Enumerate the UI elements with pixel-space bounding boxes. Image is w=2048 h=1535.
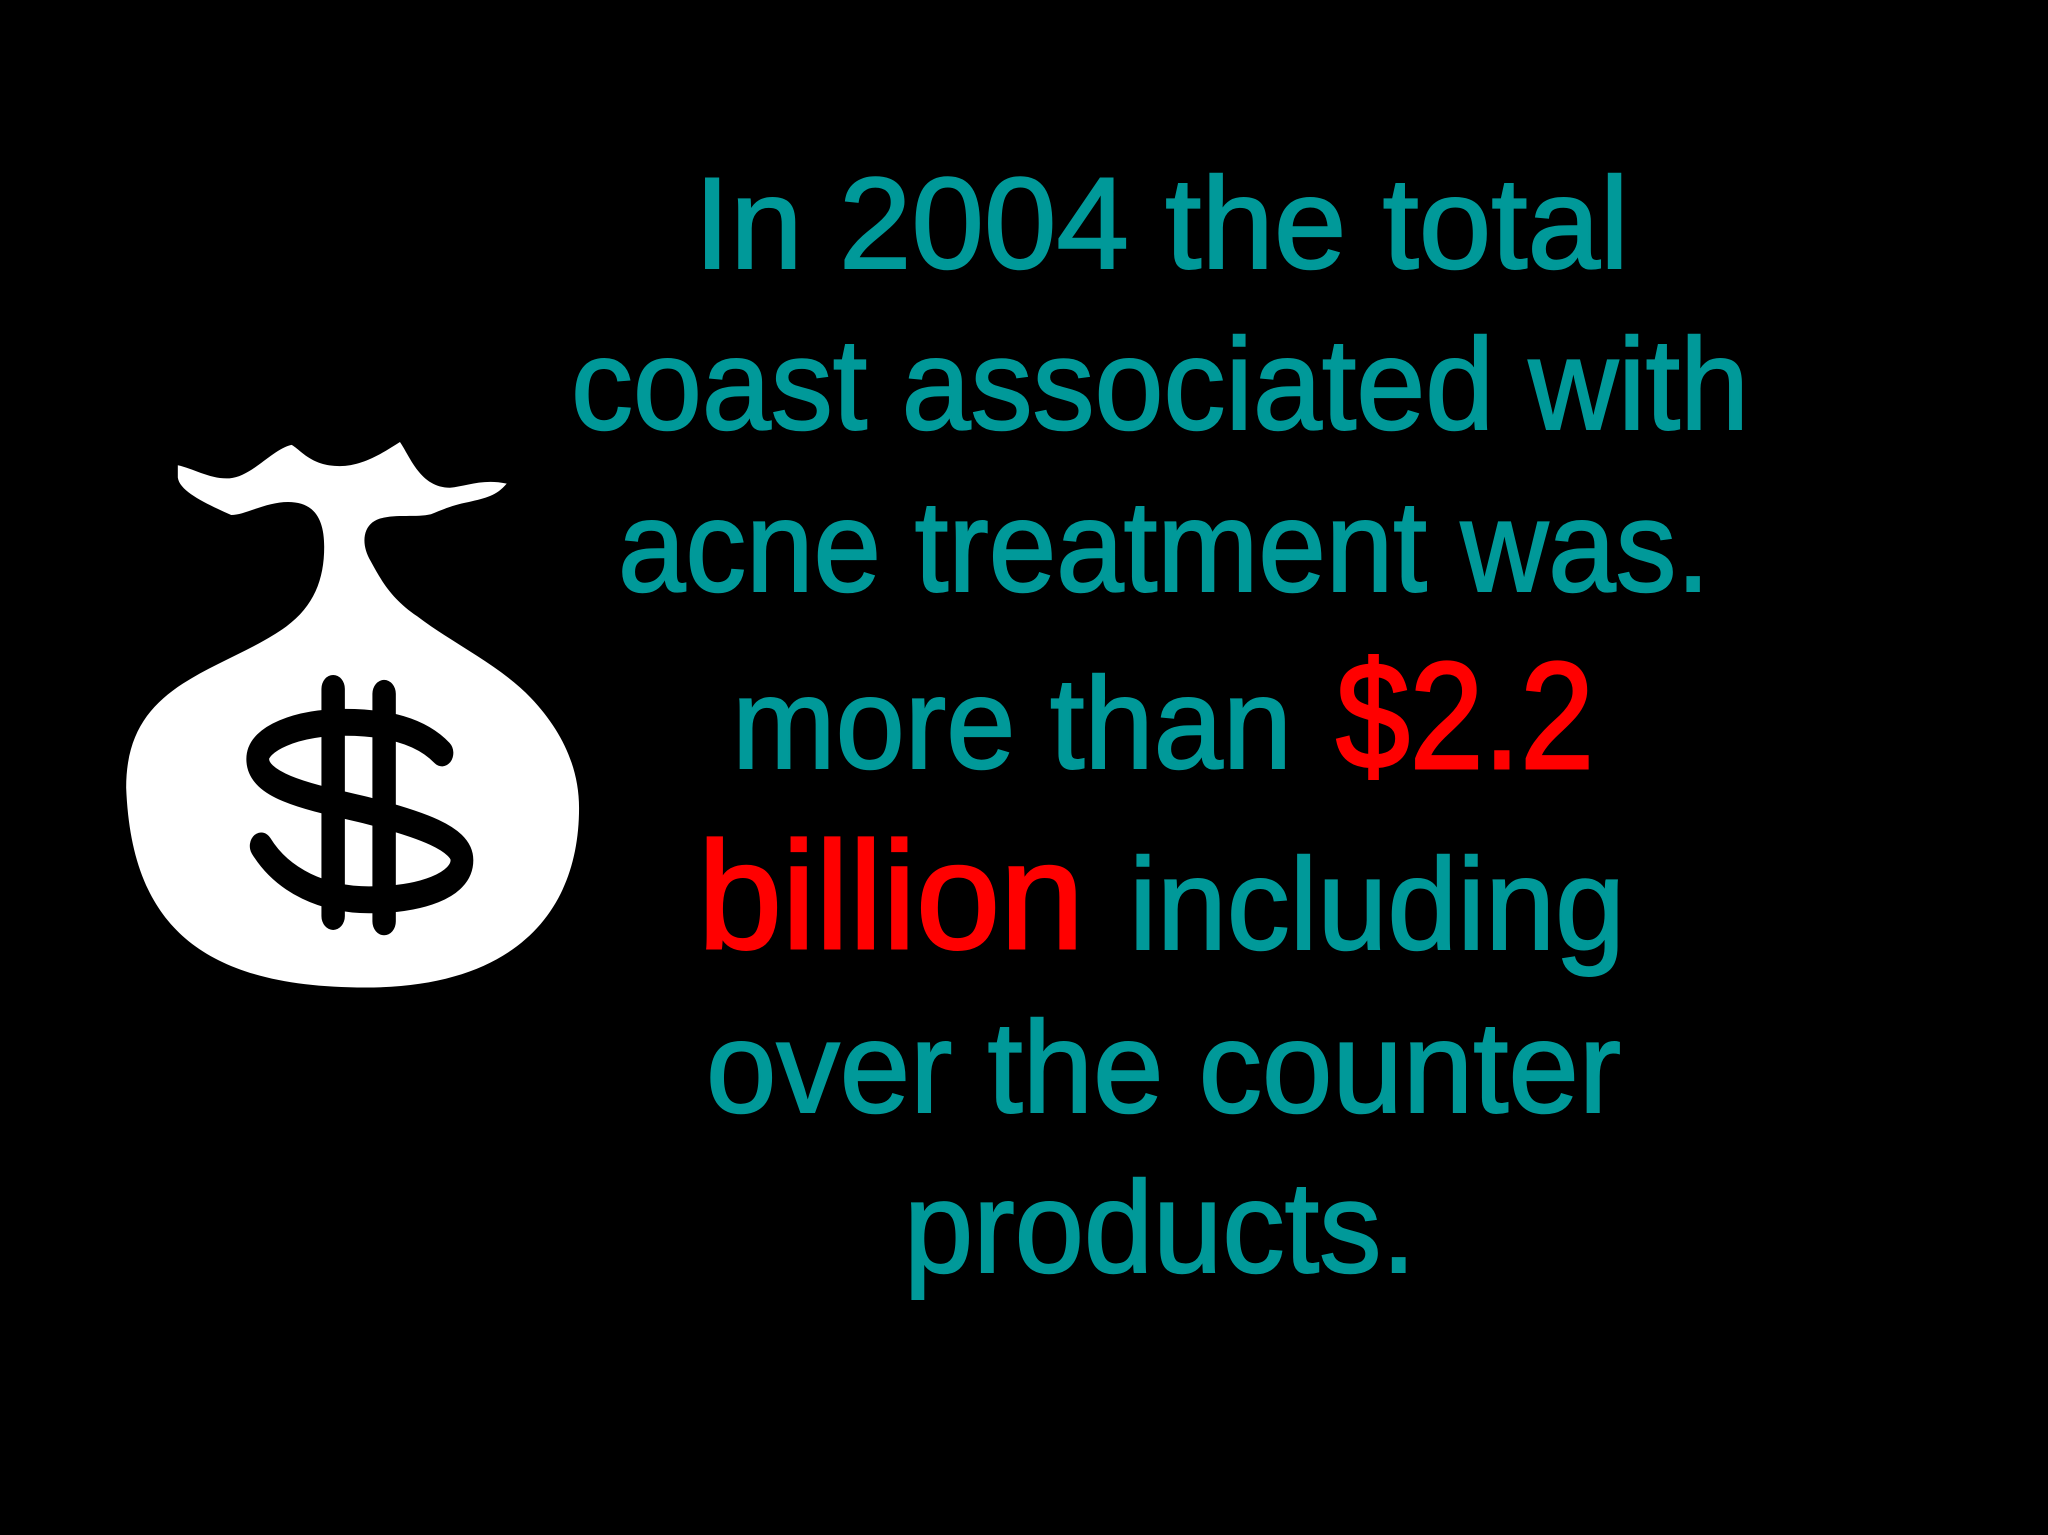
highlighted amount: $2.2: $2.2	[1336, 631, 1594, 801]
icon: money bag with dollar sign	[126, 442, 579, 988]
text line 3: acne treatment was.	[618, 473, 1710, 619]
text line 5: including: including	[1129, 831, 1625, 977]
text block: acne treatment cost statement	[571, 150, 1749, 1300]
text line 2: coast associated with	[571, 311, 1749, 457]
icon: dollar sign	[258, 689, 462, 921]
text line 6: over the counter	[706, 994, 1621, 1140]
text line 1: In 2004 the total	[694, 150, 1629, 296]
text line 4: more than: more than	[732, 650, 1292, 796]
text line 7: products.	[904, 1154, 1416, 1300]
icon: white sack	[126, 442, 579, 988]
highlighted word: billion: billion	[698, 811, 1084, 981]
